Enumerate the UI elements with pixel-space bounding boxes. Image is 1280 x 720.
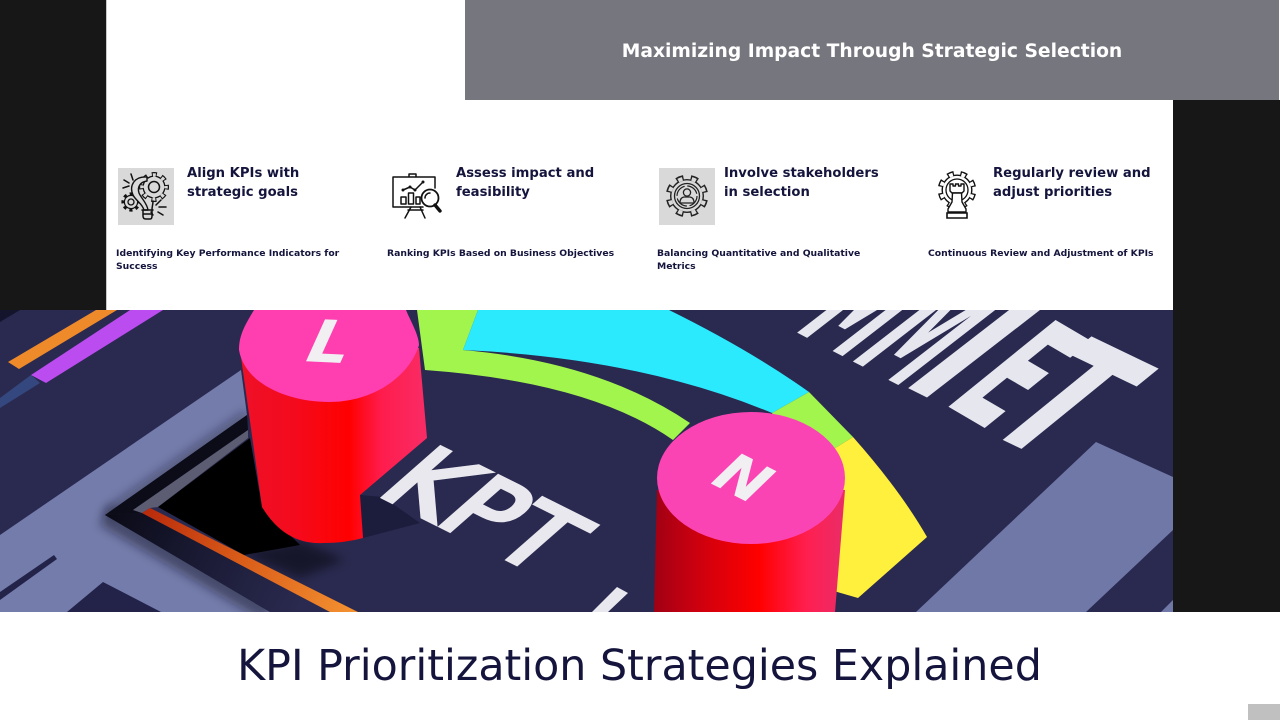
item 3 description <box>657 248 860 272</box>
cylinder letter: L <box>294 310 366 377</box>
item 3 heading <box>724 166 879 200</box>
item 2: assess impact <box>387 166 614 259</box>
gauge arc <box>417 310 927 598</box>
icon: light bulb with gears <box>118 168 174 225</box>
colored stripes <box>0 310 163 408</box>
item 4 heading: adjust priorities <box>993 185 1112 200</box>
icon: gear with chess rook <box>938 171 976 219</box>
light floor band <box>0 370 270 612</box>
icon: presentation board with magnifier <box>392 173 442 219</box>
item 1 description <box>116 248 340 272</box>
item 3 heading: Involve stakeholders <box>724 166 879 181</box>
item 3 description: Balancing Quantitative and Qualitative <box>657 248 860 259</box>
item 3 heading: in selection <box>724 185 810 200</box>
cylinder N <box>654 412 845 612</box>
item 1 heading: Align KPIs with <box>187 166 299 181</box>
right light block <box>916 442 1173 612</box>
item 4 heading <box>993 166 1151 200</box>
item 1 heading: strategic goals <box>187 185 298 200</box>
item 3 description: Metrics <box>657 261 696 272</box>
lower label fragment <box>592 587 628 612</box>
item 1 description: Identifying Key Performance Indicators for <box>116 248 339 259</box>
item 3: involve stakeholders <box>657 166 879 272</box>
item 2 description: Ranking KPIs Based on Business Objectives <box>387 248 614 259</box>
title: KPI Prioritization Strategies Explained <box>237 641 1042 691</box>
header banner <box>465 0 1279 100</box>
item 1 description: Success <box>116 261 158 272</box>
cylinder letter: N <box>696 443 790 513</box>
corner tab <box>1248 704 1280 720</box>
recessed shadow slot <box>105 415 358 612</box>
panel: KPI strategy items <box>107 100 1173 310</box>
icon: gear with person <box>659 168 715 225</box>
item 2 heading: Assess impact and <box>456 166 594 181</box>
printed label KPT: KPT <box>356 429 613 592</box>
item 4 heading: Regularly review and <box>993 166 1151 181</box>
item 4 description: Continuous Review and Adjustment of KPIs <box>928 248 1154 259</box>
item 1 heading <box>187 166 299 200</box>
item 4: review and adjust <box>928 166 1154 259</box>
illustration: KPI gauge dashboard <box>0 310 1173 612</box>
printed label MMIET <box>797 310 1159 449</box>
cylinder L <box>239 308 427 543</box>
item 1: align KPIs <box>116 166 340 272</box>
banner heading: Maximizing Impact Through Strategic Selection <box>622 41 1122 62</box>
item 2 heading: feasibility <box>456 185 530 200</box>
item 2 heading <box>456 166 594 200</box>
